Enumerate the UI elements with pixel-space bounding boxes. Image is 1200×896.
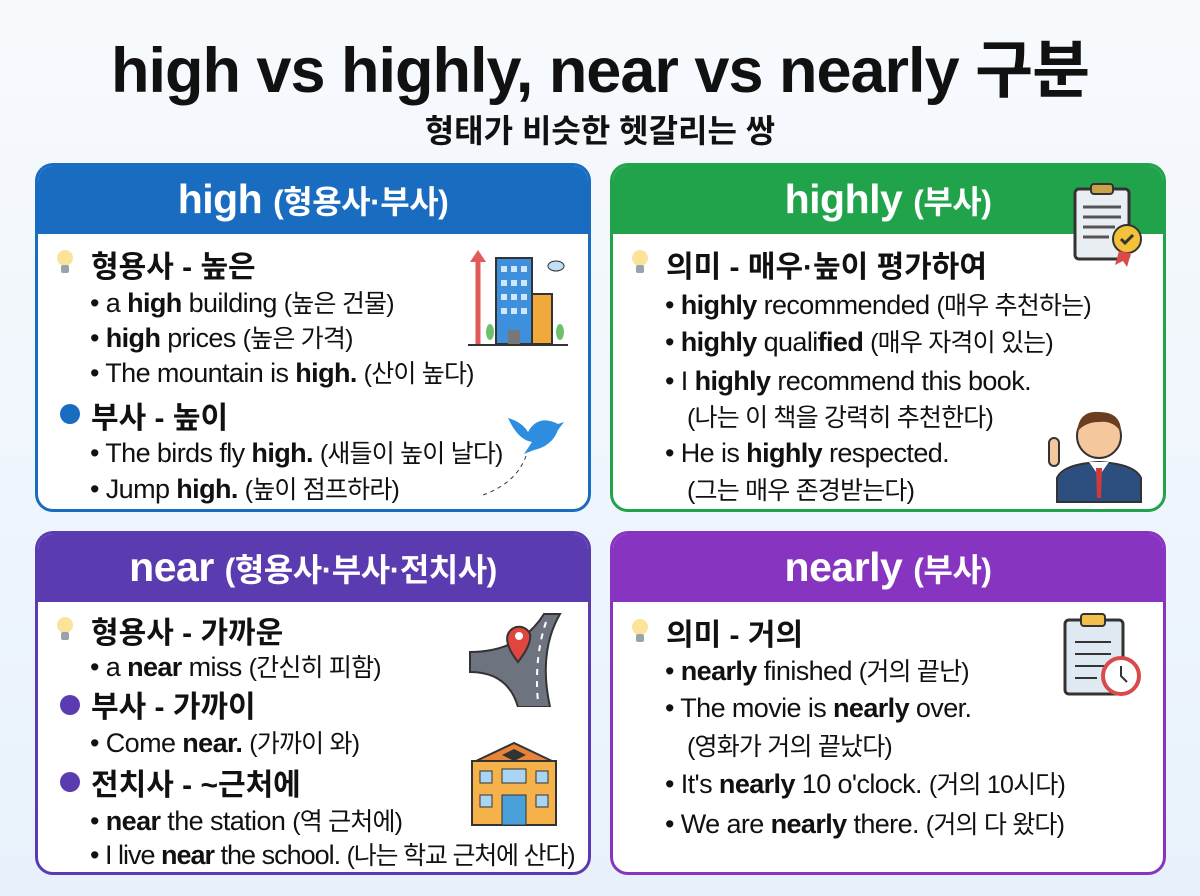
icon: school	[471, 742, 557, 826]
header: high	[38, 166, 588, 234]
heading: adjective: 형용사 - 높은	[91, 251, 256, 284]
header: high: high (형용사·부사)	[178, 176, 448, 222]
panel: nearly: • The movie is nearly over.	[665, 693, 971, 723]
icon: bird	[483, 418, 564, 496]
panel: highly: (그는 매우 존경받는다)	[687, 477, 914, 505]
panel: nearly: (영화가 거의 끝났다)	[687, 733, 892, 761]
heading: preposition: 전치사 - ~근처에	[91, 769, 301, 802]
icon: clipboard clock	[1064, 613, 1141, 696]
header: highly: highly (부사)	[785, 176, 991, 222]
icon: bulb	[57, 250, 73, 273]
panel: nearly	[610, 531, 1166, 875]
icon: man	[1048, 412, 1142, 503]
panel: high: • high prices (높은 가격)	[90, 323, 353, 353]
panel: near	[35, 531, 591, 875]
icon: dot	[60, 695, 80, 715]
title: high vs highly, near vs nearly 구분	[111, 36, 1089, 106]
heading: meaning: 의미 - 매우·높이 평가하여	[666, 251, 987, 284]
heading: adverb: 부사 - 가까이	[91, 691, 256, 724]
examples: • highly recommended (매우 추천하는)	[665, 290, 1091, 320]
header: highly	[613, 166, 1163, 234]
subtitle: 형태가 비슷한 헷갈리는 쌍	[425, 113, 775, 149]
heading: meaning: 의미 - 거의	[666, 619, 803, 652]
panel: high: • The mountain is high. (산이 높다)	[90, 358, 474, 388]
icon: road pin	[469, 613, 562, 707]
examples: adjective: • a high building (높은 건물)	[90, 288, 394, 318]
icon: bulb	[632, 250, 648, 273]
icon: bulb	[57, 617, 73, 640]
icon: certificate	[1074, 183, 1142, 267]
panel: high: • Jump high. (높이 점프하라)	[90, 474, 399, 504]
panel: near: • I live near the school. (나는 학교 근처에 산다)	[90, 840, 574, 870]
examples: • nearly finished (거의 끝난)	[665, 656, 969, 686]
panel: nearly: • We are nearly there. (거의 다 왔다)	[665, 809, 1064, 839]
panel: highly: (나는 이 책을 강력히 추천한다)	[687, 404, 993, 432]
example: adverb: • Come near. (가까이 와)	[90, 728, 359, 758]
panel: high	[35, 163, 591, 512]
panel: highly: • He is highly respected.	[665, 438, 949, 468]
header: near	[38, 534, 588, 602]
icon: dot	[60, 772, 80, 792]
heading: adjective: 형용사 - 가까운	[91, 617, 283, 650]
header: near: near (형용사·부사·전치사)	[129, 544, 497, 590]
icon: bulb	[632, 619, 648, 642]
examples: preposition: • near the station (역 근처에)	[90, 806, 402, 836]
panel: highly	[610, 163, 1166, 512]
panel: highly: • highly qualified (매우 자격이 있는)	[665, 327, 1053, 357]
header: nearly	[613, 534, 1163, 602]
panel: highly: • I highly recommend this book.	[665, 366, 1031, 396]
heading: adverb: 부사 - 높이	[91, 402, 228, 435]
example: adjective: • a near miss (간신히 피함)	[90, 652, 381, 682]
icon: building	[468, 250, 568, 346]
panel: nearly: • It's nearly 10 o'clock. (거의 10시다)	[665, 769, 1065, 799]
header: nearly: nearly (부사)	[785, 544, 991, 590]
examples: adverb: • The birds fly high. (새들이 높이 날다)	[90, 438, 503, 468]
icon: dot	[60, 404, 80, 424]
